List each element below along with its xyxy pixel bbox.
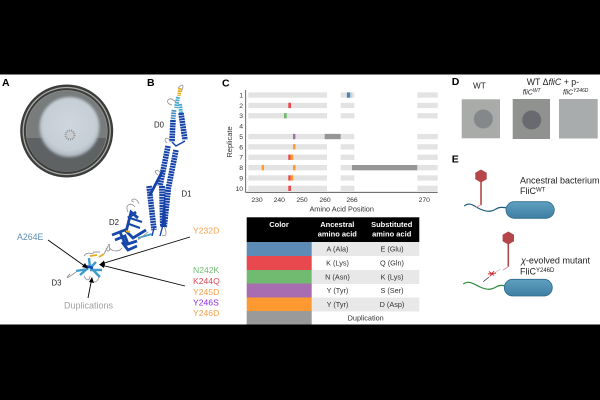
table rows: Q (Gln) <box>380 258 404 268</box>
ancestral genotype: FliC <box>520 186 536 196</box>
panel label E: E <box>452 154 459 166</box>
position tick labels: 260 <box>319 197 331 204</box>
panel B: flagellin protein structure: D2 <box>109 218 119 227</box>
ancestral genotype: WT <box>536 188 546 194</box>
table rows: E (Glu) <box>380 244 404 254</box>
panel B: flagellin protein structure: D3 <box>52 278 61 288</box>
mutation marks <box>262 92 417 191</box>
arrows to mutation sites <box>48 237 190 298</box>
table header: Substituted <box>371 220 413 229</box>
replicate tick labels: 10 <box>235 186 243 193</box>
table rows <box>247 242 419 325</box>
ancestral label: Ancestral bacterium <box>520 175 600 185</box>
plaque fliC Y246D <box>559 99 598 138</box>
column headings <box>473 77 589 96</box>
structure ribbon <box>67 85 185 282</box>
table header: Color <box>269 220 289 229</box>
table rows: Y (Tyr) <box>327 286 348 295</box>
replicate tick labels: 8 <box>239 165 243 172</box>
table rows: Duplication <box>348 314 384 322</box>
y axis title: Replicate <box>225 126 234 158</box>
axes <box>246 90 438 192</box>
column headings: WT <box>533 88 542 94</box>
replicate tracks <box>248 92 438 191</box>
replicate tick labels: 7 <box>239 155 243 162</box>
mutation list: Y246D <box>193 308 219 318</box>
replicate tick labels: 2 <box>239 103 243 110</box>
evolved mutant diagram <box>463 232 552 296</box>
panel A: agar plate photograph <box>2 77 113 178</box>
replicate tick labels: 5 <box>239 134 243 141</box>
domain labels: D0 <box>154 120 165 130</box>
mutation label Y232D: Y232D <box>193 226 219 236</box>
replicate tick labels: 9 <box>239 175 243 182</box>
replicate tick labels: 4 <box>239 124 243 131</box>
top black bar <box>0 0 600 74</box>
replicate tick labels: 3 <box>239 113 243 120</box>
plaque WT <box>462 99 500 138</box>
legend table <box>247 217 419 325</box>
bottom black bar <box>0 324 600 400</box>
table header <box>247 217 419 242</box>
table rows: N (Asn) <box>325 272 350 282</box>
mutation list <box>193 265 220 318</box>
plaque fliC WT <box>513 99 550 139</box>
table rows: K (Lys) <box>326 258 349 268</box>
domain D2 <box>109 204 148 251</box>
panel label A: A <box>2 77 10 89</box>
column headings: WT ΔfliC + p- <box>527 77 579 87</box>
column headings: WT <box>473 82 486 90</box>
position tick labels: 250 <box>296 197 308 204</box>
table rows: Y (Tyr) <box>327 300 348 309</box>
position tick labels: 266 <box>346 197 358 204</box>
mutant label: χ-evolved mutant <box>520 256 590 266</box>
panel C: amino acid position chart <box>222 78 438 214</box>
position tick labels: 230 <box>251 197 263 204</box>
mutation list: K244Q <box>193 276 220 286</box>
position tick labels: 240 <box>274 197 285 204</box>
mutant genotype: Y246D <box>536 268 555 274</box>
column headings: fliC <box>563 90 573 96</box>
table header: amino acid <box>372 230 412 239</box>
table header: Ancestral <box>320 220 354 229</box>
panel B: flagellin protein structure: D1 <box>182 190 191 198</box>
position tick labels <box>251 197 430 204</box>
position tick labels: 270 <box>419 197 430 204</box>
replicate tick labels: 1 <box>239 92 243 100</box>
plate photo <box>20 84 113 178</box>
column headings: fliC <box>523 90 533 96</box>
table rows: D (Asp) <box>380 300 404 309</box>
x axis title: Amino Acid Position <box>309 204 374 214</box>
panel D: phage plaque assays <box>452 76 598 139</box>
table rows: A (Ala) <box>327 244 348 254</box>
table header: amino acid <box>318 230 357 239</box>
panel E: bacteria and phage schematic <box>452 154 600 296</box>
mutant genotype: FliC <box>520 266 536 276</box>
mutation label A264E: A264E <box>17 232 44 242</box>
replicate tick labels: 6 <box>239 144 243 151</box>
ancestral bacterium diagram <box>464 170 554 218</box>
replicate tick labels <box>235 92 243 193</box>
label duplications: Duplications <box>64 300 114 310</box>
table rows: K (Lys) <box>381 272 403 282</box>
column headings: Y246D <box>573 88 589 94</box>
table rows: S (Ser) <box>380 286 404 295</box>
panel label D: D <box>452 76 460 88</box>
panel label B: B <box>147 77 155 89</box>
panel label C: C <box>222 78 230 90</box>
mutation list: Y246S <box>193 298 219 308</box>
mutation list: N242K <box>193 265 220 275</box>
panel B: flagellin protein structure <box>17 77 220 318</box>
domain D3 <box>76 246 108 277</box>
mutation list: Y245D <box>193 287 219 297</box>
